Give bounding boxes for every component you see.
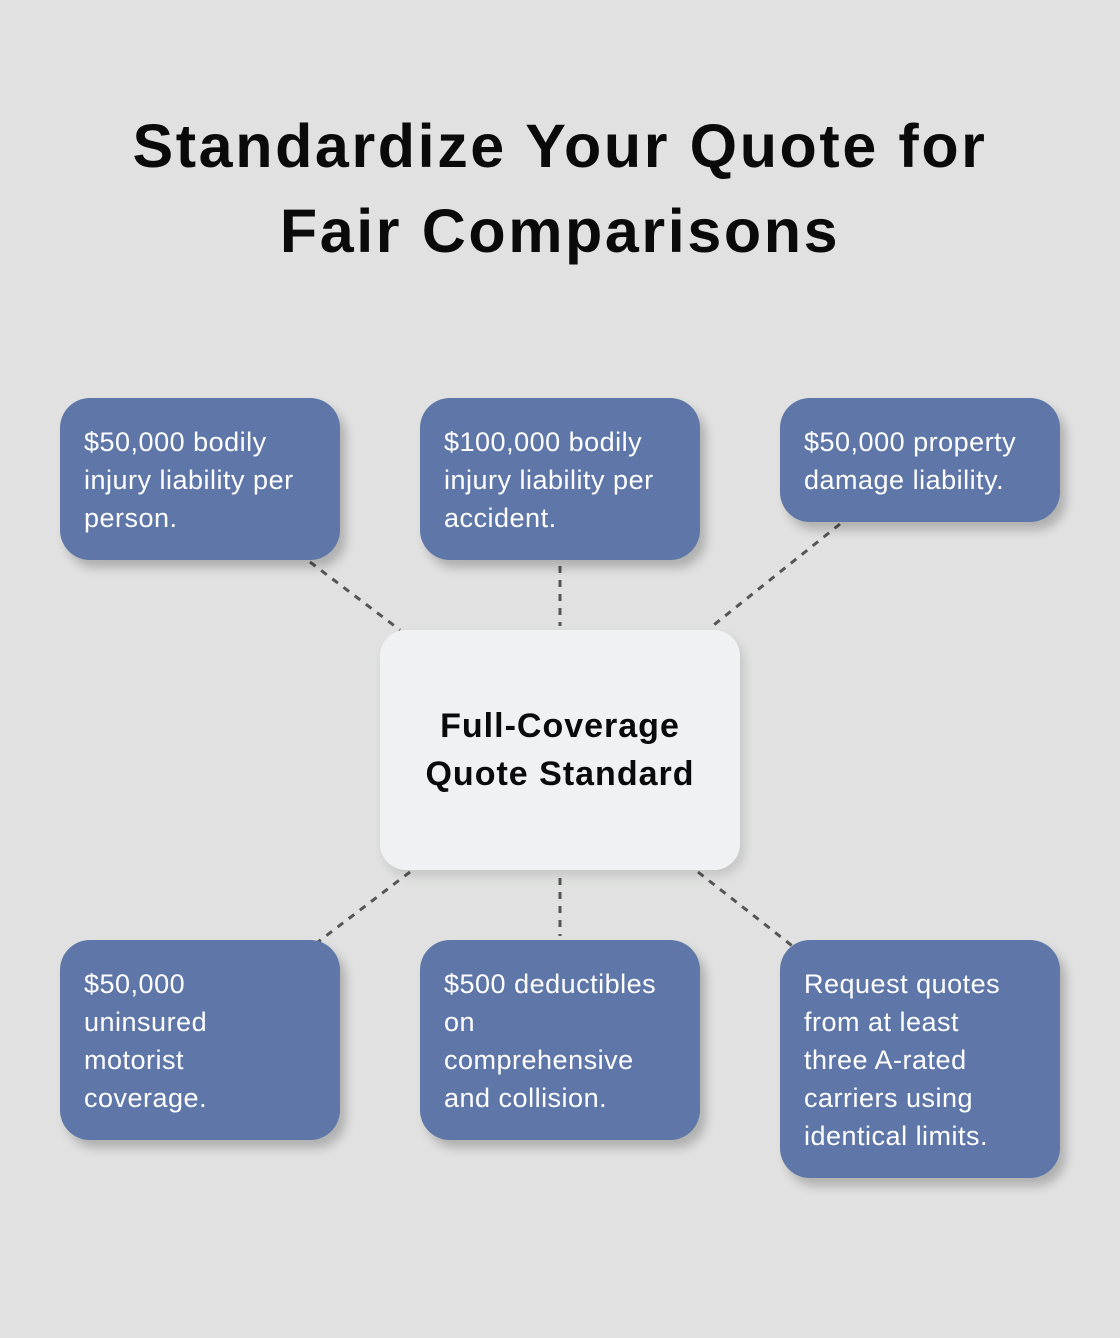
box: bodily injury per person: person.	[84, 503, 178, 533]
box: deductibles: $500 deductibles	[444, 969, 656, 999]
box: bodily injury per person	[60, 398, 340, 560]
center box	[380, 630, 740, 870]
box: request quotes: carriers using	[804, 1083, 973, 1113]
title	[132, 112, 988, 265]
box: request quotes: Request quotes	[804, 969, 1000, 999]
box: bodily injury per accident	[420, 398, 700, 560]
box: bodily injury per accident: $100,000 bodily	[444, 427, 642, 457]
box: uninsured motorist: uninsured	[84, 1007, 207, 1037]
title: Fair Comparisons	[280, 197, 840, 265]
box: deductibles	[420, 940, 700, 1140]
box: property damage	[780, 398, 1060, 522]
box: uninsured motorist: coverage.	[84, 1083, 207, 1113]
center box: Full-Coverage	[440, 707, 680, 745]
box: uninsured motorist: motorist	[84, 1045, 184, 1075]
box: deductibles: comprehensive	[444, 1045, 634, 1075]
box: request quotes: from at least	[804, 1007, 959, 1037]
box: bodily injury per person: $50,000 bodily	[84, 427, 267, 457]
box: uninsured motorist	[60, 940, 340, 1140]
title: Standardize Your Quote for	[132, 112, 988, 180]
box: deductibles: and collision.	[444, 1083, 607, 1113]
center box: Quote Standard	[425, 755, 695, 793]
box: property damage: $50,000 property	[804, 427, 1016, 457]
box: request quotes	[780, 940, 1060, 1178]
box: uninsured motorist: $50,000	[84, 969, 185, 999]
box: request quotes: three A-rated	[804, 1045, 967, 1075]
box: deductibles: on	[444, 1007, 475, 1037]
box: bodily injury per accident: injury liability per	[444, 465, 654, 495]
box: bodily injury per person: injury liability per	[84, 465, 294, 495]
box: property damage: damage liability.	[804, 465, 1004, 495]
box: request quotes: identical limits.	[804, 1121, 988, 1151]
box: bodily injury per accident: accident.	[444, 503, 557, 533]
